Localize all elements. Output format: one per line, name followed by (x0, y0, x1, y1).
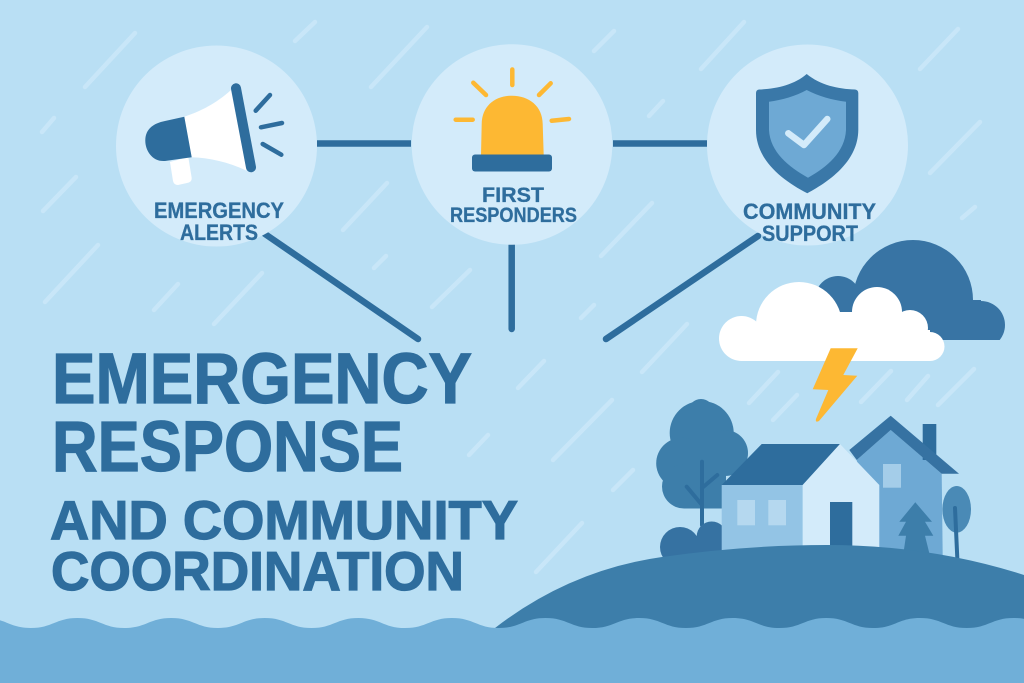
water waves (0, 618, 1024, 683)
icon: lightning bolt (813, 348, 858, 422)
hill (495, 545, 1024, 640)
node: community support (707, 44, 908, 246)
label: community support: SUPPORT (762, 221, 858, 246)
front house left wing (722, 444, 840, 551)
label: community support (743, 199, 876, 246)
back house (849, 416, 959, 556)
rain streaks (42, 22, 980, 572)
small round tree (942, 486, 971, 558)
label: emergency alerts: EMERGENCY (154, 198, 284, 223)
white cloud (719, 282, 944, 368)
bushes (660, 522, 727, 567)
label: first responders: RESPONDERS (450, 204, 577, 227)
node: first responders (412, 44, 612, 245)
label: emergency alerts: ALERTS (180, 220, 258, 245)
house group (722, 416, 959, 556)
title: EMERGENCY (52, 340, 472, 419)
label: emergency alerts (154, 198, 284, 245)
label: first responders: FIRST (482, 184, 544, 207)
label: community support: COMMUNITY (743, 199, 876, 224)
icon: shield with check (756, 74, 858, 193)
leafy tree (656, 399, 748, 525)
connector lines (265, 144, 758, 339)
pine tree (898, 502, 933, 556)
dark storm cloud (818, 240, 1005, 340)
icon: megaphone (145, 88, 282, 185)
front house gable and door (803, 444, 879, 552)
title (50, 340, 518, 602)
title: COORDINATION (51, 540, 464, 602)
icon: siren light (456, 70, 569, 172)
title: AND COMMUNITY (50, 489, 518, 551)
title: RESPONSE (52, 408, 403, 487)
label: first responders (450, 184, 577, 227)
node: emergency alerts (116, 46, 317, 246)
